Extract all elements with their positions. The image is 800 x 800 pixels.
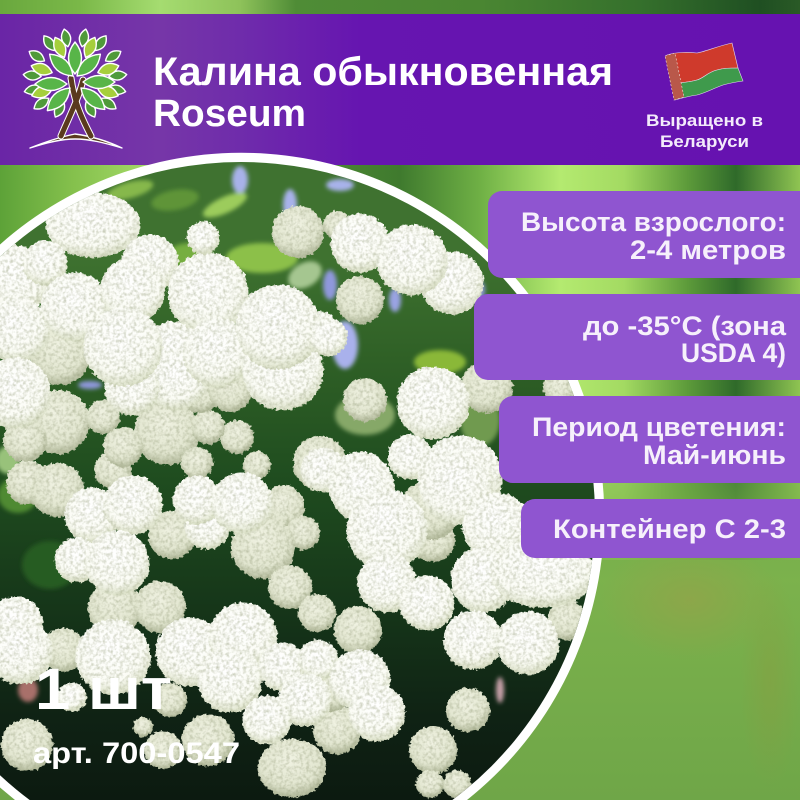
title: Roseum — [153, 93, 306, 135]
logo trunk and roots — [30, 78, 122, 148]
panel: container size — [521, 499, 800, 558]
header band — [0, 14, 800, 165]
round photo frame with white border — [0, 153, 604, 800]
panel: frost hardiness — [474, 294, 800, 380]
title — [153, 50, 613, 135]
title: Калина обыкновенная — [153, 50, 613, 94]
logo large leaves — [35, 42, 115, 115]
panel: frost hardiness: до -35°С (зона — [583, 311, 786, 341]
quantity label: 1 шт — [35, 657, 172, 722]
article number: арт. 700-0547 — [33, 737, 240, 770]
panel: container size: Контейнер С 2-3 — [553, 514, 786, 544]
logo outer leaves — [23, 28, 127, 119]
panel: adult height: Высота взрослого: — [521, 207, 786, 237]
caption: grown in Belarus — [646, 111, 763, 151]
panel: frost hardiness: USDA 4) — [681, 338, 786, 368]
logo lime leaves — [30, 35, 120, 101]
caption: grown in Belarus: Беларуси — [660, 132, 749, 151]
panel: flowering period — [499, 396, 800, 483]
panel: flowering period: Период цветения: — [532, 412, 786, 442]
logo: tree emblem — [23, 28, 127, 148]
panel: adult height: 2-4 метров — [630, 235, 786, 265]
panel: adult height — [488, 191, 800, 278]
panel: flowering period: Май-июнь — [643, 440, 786, 470]
caption: grown in Belarus: Выращено в — [646, 111, 763, 130]
photo: white viburnum flower clusters — [0, 150, 620, 800]
icon: flag of Belarus — [665, 43, 743, 100]
